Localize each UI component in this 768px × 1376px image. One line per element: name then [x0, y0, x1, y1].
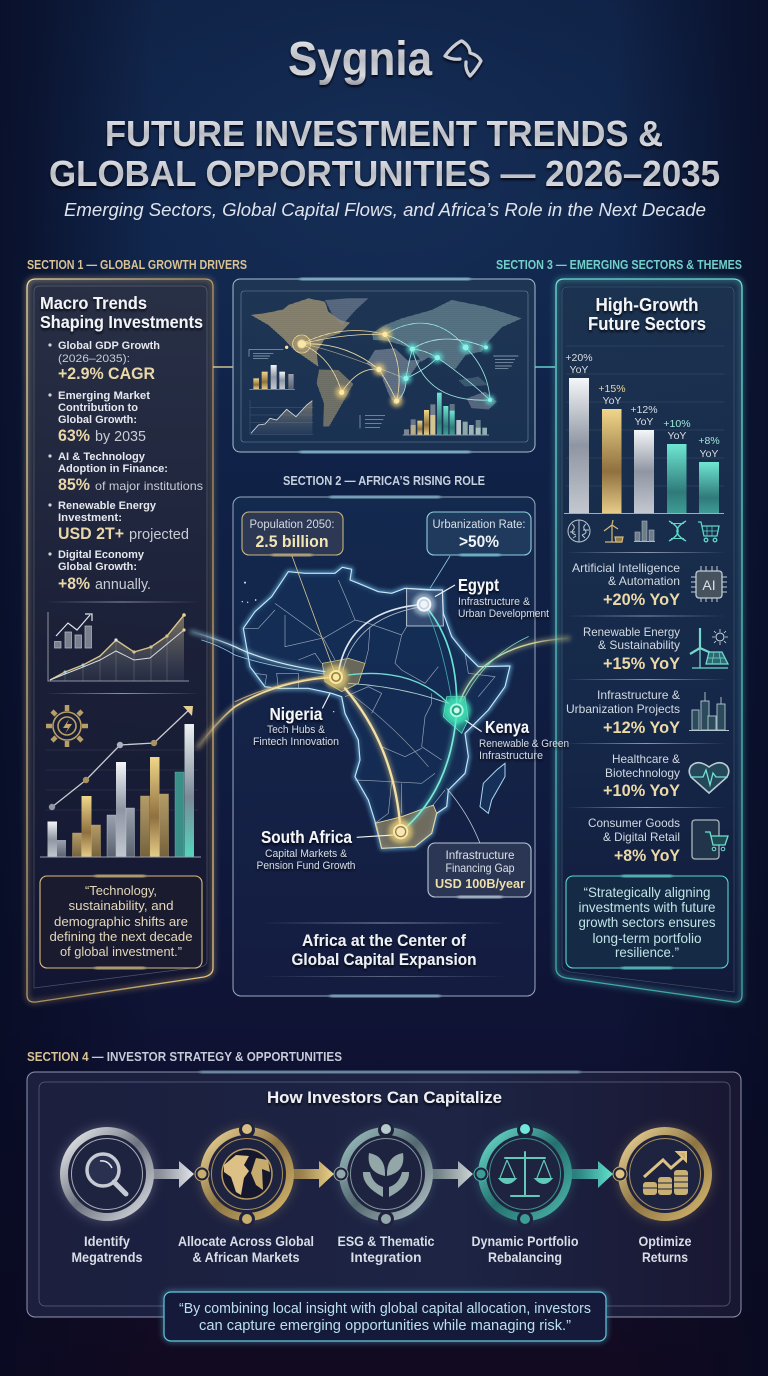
metric: AI adoption: AI & Technology: [58, 451, 146, 463]
callout: left quote: “Technology,: [85, 883, 157, 898]
sector: AI: [572, 561, 727, 609]
sector: healthcare: Biotechnology: [605, 766, 680, 780]
sector: infrastructure: [566, 688, 729, 737]
metric: emerging markets: 63%: [58, 427, 90, 445]
icon: globe: [222, 1149, 272, 1199]
label: Kenya: Infrastructure: [479, 750, 543, 762]
chart: sector growth bars: YoY: [700, 448, 718, 460]
sector: renewable: +15% YoY: [603, 654, 681, 673]
heading: high-growth: Future Sectors: [588, 314, 706, 334]
title: [49, 113, 720, 194]
chart: map small bars: [249, 365, 295, 389]
arrow 3: [429, 1161, 473, 1188]
label: South Africa: Pension Fund Growth: [256, 860, 356, 872]
leaders: [292, 556, 482, 843]
sector: infrastructure: Infrastructure &: [597, 688, 680, 702]
panel: high growth sectors: [556, 279, 742, 1002]
label: South Africa: Capital Markets &: [265, 848, 348, 860]
label: Egypt: Infrastructure &: [458, 596, 531, 608]
sector: infrastructure: +12% YoY: [603, 718, 681, 737]
callout: left quote: defining the next decade: [50, 929, 192, 944]
sector: consumer: & Digital Retail: [603, 830, 680, 844]
metric: renewable investment: Investment:: [58, 512, 122, 524]
callout: bottom quote: [164, 1292, 606, 1341]
heading: how investors can capitalize: How Investors Can Capitalize: [267, 1088, 502, 1107]
step 4: rebalancing: Rebalancing: [488, 1249, 562, 1265]
icon: brain: [568, 520, 590, 542]
chart: sector growth bars: +12%: [630, 404, 658, 416]
arrow 4: [569, 1161, 613, 1188]
map: dotted continents and flow arcs: [249, 298, 522, 435]
sector: consumer: +8% YoY: [614, 846, 681, 865]
sector: consumer: Consumer Goods: [588, 816, 680, 830]
metric: renewable investment: [48, 500, 189, 543]
metric: renewable investment: projected: [129, 527, 189, 543]
arrow 2: [290, 1161, 334, 1188]
callout: right quote: long-term portfolio: [592, 930, 702, 946]
label: Nigeria: Nigeria: [270, 704, 323, 724]
label: Nigeria: Tech Hubs &: [267, 724, 326, 736]
metric: AI adoption: 85%: [58, 476, 90, 494]
arcs: capital flows: [192, 604, 568, 832]
step 5: optimize returns: Optimize: [638, 1233, 692, 1249]
metric: AI adoption: [48, 451, 203, 494]
label: South Africa: [256, 827, 356, 872]
icon: gear with lightning: [46, 705, 88, 747]
icon: turbine and solar: [690, 628, 728, 668]
icon: heart with pulse: [689, 763, 729, 793]
icon: hands with leaves: [363, 1153, 409, 1197]
sector: AI: & Automation: [608, 574, 680, 588]
connector left: [213, 366, 233, 368]
node: Nigeria: [324, 665, 348, 689]
callout: right quote: growth sectors ensures: [578, 914, 716, 930]
label: Nigeria: Fintech Innovation: [253, 736, 339, 748]
icon: AI chip: AI: [702, 577, 716, 593]
section 4 label: SECTION 4 — INVESTOR STRATEGY & OPPORTUNITIES: [27, 1050, 342, 1064]
panel: Africa's rising role: [192, 496, 569, 997]
metric: emerging markets: Global Growth:: [58, 414, 137, 426]
heading: Africa at the center: [292, 932, 476, 969]
chart: map small line: [250, 400, 313, 434]
section 1 label: SECTION 1 — GLOBAL GROWTH DRIVERS: [27, 258, 247, 272]
metric: GDP growth: Global GDP Growth: [58, 340, 160, 352]
icon: AI chip: [691, 566, 727, 602]
step 3: ESG: [334, 1122, 435, 1265]
node: North America hub: [292, 335, 311, 353]
callout: financing gap: [428, 843, 531, 898]
metric: digital economy: +8%: [58, 575, 90, 593]
label: Kenya: [479, 717, 569, 762]
step 5: optimize returns: Returns: [642, 1249, 688, 1265]
sector: healthcare: +10% YoY: [603, 781, 681, 800]
step 5: optimize returns: [613, 1128, 711, 1265]
metric: AI adoption: of major institutions: [95, 479, 203, 493]
metric: digital economy: annually.: [95, 577, 151, 593]
heading: macro trends: Macro Trends: [40, 293, 147, 313]
callout: financing gap: USD 100B/year: [435, 877, 525, 891]
connector right: [535, 366, 555, 368]
sector: healthcare: [603, 752, 729, 800]
heading: high-growth: [588, 295, 706, 334]
title: FUTURE INVESTMENT TRENDS &: [105, 113, 663, 154]
label: Egypt: [458, 575, 549, 620]
panel: macro trends: [27, 279, 213, 1002]
callout: population: [242, 512, 343, 556]
callout: urbanization: Urbanization Rate:: [432, 519, 526, 531]
sector: infrastructure: Urbanization Projects: [566, 702, 680, 716]
sector: renewable: & Sustainability: [598, 638, 680, 652]
sector: AI: +20% YoY: [603, 590, 681, 609]
heading: Africa at the center: Africa at the Center of: [302, 932, 466, 950]
metric: emerging markets: [48, 390, 150, 445]
chart: grouped bars with trend line: [40, 706, 201, 858]
metric: emerging markets: Emerging Market: [58, 390, 150, 402]
sector: renewable: [583, 625, 728, 673]
sector: renewable: Renewable Energy: [583, 625, 680, 639]
heading: high-growth: High-Growth: [596, 295, 698, 315]
label: Nigeria: [253, 704, 339, 748]
chart: sector growth bars: [564, 346, 724, 514]
icon: coins and arrow: [643, 1152, 688, 1195]
chart: sector growth bars: YoY: [668, 430, 686, 442]
panel: world capital flow map: [233, 278, 535, 453]
callout: population: Population 2050:: [250, 519, 334, 531]
metric: renewable investment: Renewable Energy: [58, 500, 157, 512]
logo: Sygnia: Sygnia: [288, 33, 432, 86]
metric: GDP growth: [48, 340, 160, 383]
panel: investor strategy: [27, 1071, 741, 1317]
node: Egypt: [413, 593, 435, 616]
chart: mini area chart: [48, 612, 189, 681]
label: Egypt: Egypt: [458, 575, 499, 595]
callout: left quote: [40, 875, 202, 969]
callout: financing gap: Financing Gap: [446, 861, 515, 875]
step 4: rebalancing: [472, 1122, 578, 1265]
label: South Africa: South Africa: [261, 827, 352, 847]
chart: sector growth bars: YoY: [570, 364, 588, 376]
step 2: allocate: [178, 1122, 314, 1265]
metric: digital economy: Global Growth:: [58, 561, 137, 573]
chart: sector growth bars: +20%: [565, 352, 593, 364]
callout: left quote: sustainability, and: [68, 898, 174, 913]
icon: wind turbine: [604, 520, 623, 542]
callout: bottom quote: “By combining local insight with global capital allocation, investors: [179, 1300, 591, 1317]
step 4: rebalancing: Dynamic Portfolio: [472, 1233, 578, 1249]
metric: AI adoption: Adoption in Finance:: [58, 463, 168, 475]
icon: dna: [669, 521, 686, 541]
chart: sector growth bars: +8%: [698, 435, 720, 447]
step 1: identify megatrends: Identify: [84, 1233, 130, 1249]
sector: AI: Artificial Intelligence: [572, 561, 680, 575]
callout: right quote: “Strategically aligning: [584, 884, 710, 900]
callout: right quote: [566, 875, 728, 969]
icon: skyline: [689, 692, 729, 730]
callout: urbanization: >50%: [459, 533, 499, 551]
callout: financing gap: Infrastructure: [446, 848, 515, 862]
map: Africa: [192, 556, 568, 848]
metric: emerging markets: Contribution to: [58, 402, 138, 414]
section 2 label: SECTION 2 — AFRICA’S RISING ROLE: [283, 473, 485, 488]
step 1: identify megatrends: Megatrends: [72, 1249, 143, 1265]
heading: macro trends: [40, 293, 203, 332]
icon: Africa outline mark: [445, 41, 481, 76]
metric: digital economy: [48, 549, 151, 593]
label: Kenya: Kenya: [485, 717, 529, 737]
sector: consumer: [588, 816, 728, 865]
subtitle: Emerging Sectors, Global Capital Flows, and Africa’s Role in the Next Decade: [64, 200, 706, 220]
metric: emerging markets: by 2035: [95, 429, 146, 445]
chart: sector growth bars: +10%: [663, 418, 691, 430]
step 2: allocate: Allocate Across Global: [178, 1233, 314, 1249]
callout: urbanization: [427, 512, 531, 556]
sector: healthcare: Healthcare &: [612, 752, 680, 766]
heading: Africa at the center: Global Capital Expansion: [292, 951, 476, 969]
label: Kenya: Renewable & Green: [479, 738, 569, 750]
heading: macro trends: Shaping Investments: [40, 312, 203, 332]
chart: map right bars: [403, 393, 489, 435]
metric: GDP growth: +2.9% CAGR: [58, 365, 155, 383]
chart: sector growth bars: YoY: [603, 395, 621, 407]
callout: population: 2.5 billion: [256, 533, 328, 551]
arrow 1: [150, 1161, 194, 1188]
metric: GDP growth: (2026–2035):: [58, 353, 130, 365]
node: South Africa: [389, 820, 413, 844]
metric: renewable investment: USD 2T+: [58, 525, 124, 543]
chart: sector growth bars: YoY: [635, 416, 653, 428]
callout: right quote: resilience.”: [615, 944, 679, 960]
step 2: allocate: & African Markets: [192, 1249, 300, 1265]
step 3: ESG: ESG & Thematic: [338, 1233, 435, 1249]
node: Kenya: [443, 696, 471, 724]
step 3: ESG: Integration: [350, 1249, 422, 1265]
chart: sector growth bars: +15%: [598, 383, 626, 395]
title: GLOBAL OPPORTUNITIES — 2026–2035: [49, 153, 720, 194]
step 1: identify megatrends: [61, 1128, 153, 1265]
callout: right quote: investments with future: [578, 899, 716, 915]
callout: left quote: demographic shifts are: [54, 914, 188, 929]
icon: scales: [500, 1152, 551, 1196]
metric: digital economy: Digital Economy: [58, 549, 145, 561]
icon: city: [634, 521, 655, 542]
callout: bottom quote: can capture emerging opportunities while managing risk.”: [199, 1317, 571, 1334]
callout: left quote: of global investment.”: [60, 944, 182, 959]
icon: tablet with cart: [692, 820, 728, 859]
icon: shopping cart: [698, 522, 719, 542]
icon: magnifier: [87, 1154, 126, 1194]
label: Egypt: Urban Development: [458, 608, 549, 620]
